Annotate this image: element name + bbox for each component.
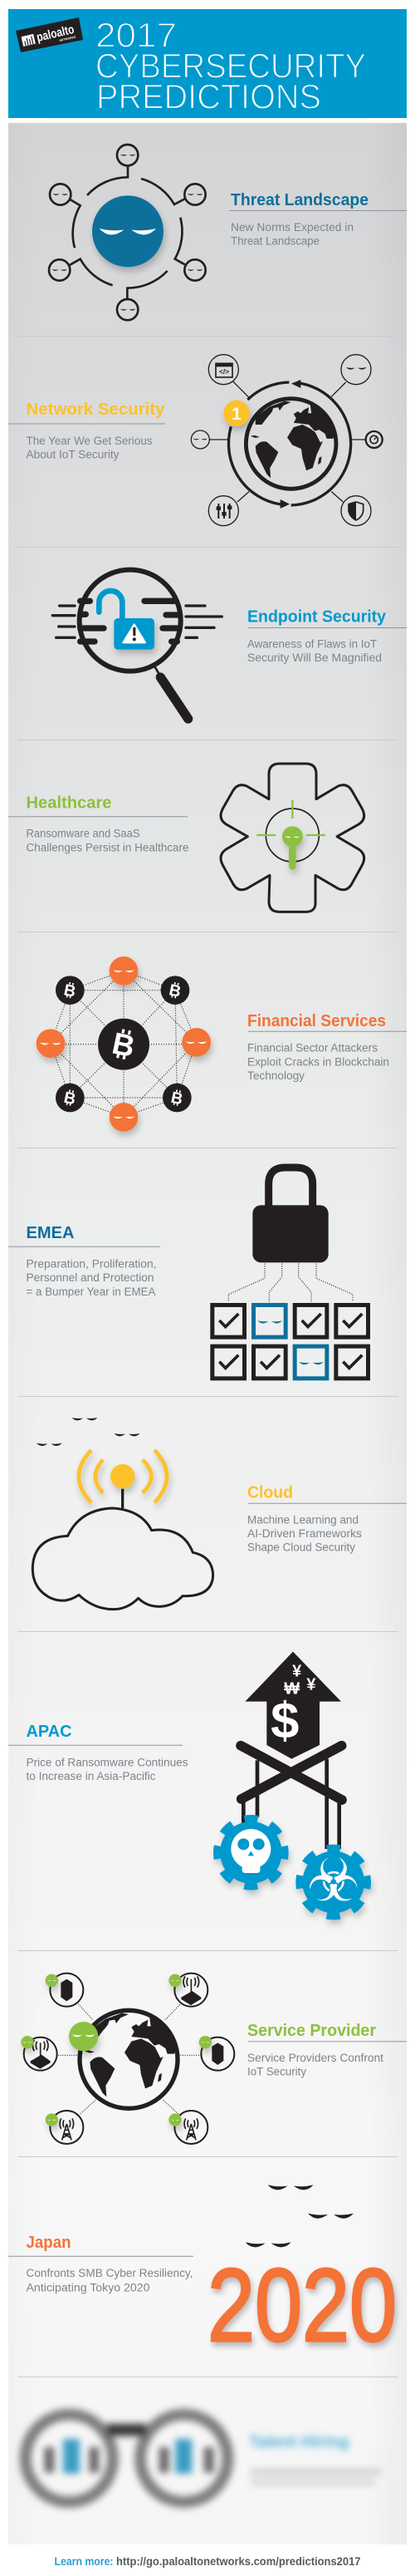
panel: cloud (32, 1418, 407, 1610)
currency symbols: $ (271, 1693, 299, 1750)
text: healthcare description: Challenges Persist in Healthcare (27, 841, 189, 853)
icon: skull gear (217, 1819, 285, 1886)
text: japan description (27, 2267, 193, 2293)
icon: star of life with target (221, 764, 364, 912)
badge: number 1 (223, 401, 250, 426)
icon: shield (349, 502, 364, 520)
icon: globe with orbit (191, 355, 383, 526)
panel: network security (8, 355, 383, 526)
heading: Threat Landscape: Threat Landscape (231, 191, 369, 209)
icon: green keyhole attacker (282, 826, 303, 870)
heading: Cloud: Cloud (247, 1484, 293, 1502)
heading: Network Security: Network Security (27, 401, 165, 419)
currency symbols (271, 1663, 316, 1750)
heading: Japan: Japan (27, 2234, 71, 2252)
text: japan description: Confronts SMB Cyber Resiliency, (27, 2267, 193, 2279)
text: cloud description: AI-Driven Frameworks (247, 1527, 362, 1540)
icon: rising ransom arrow with crossbones and gears (217, 1652, 367, 1916)
text: threat landscape description: New Norms Expected in (231, 221, 354, 234)
heading: Endpoint Security: Endpoint Security (247, 608, 387, 627)
icon: threat network (49, 145, 206, 320)
currency symbols: ¥ (292, 1663, 302, 1681)
text: endpoint security description (247, 637, 382, 664)
text: cloud description: Shape Cloud Security (247, 1541, 355, 1554)
title (95, 15, 366, 116)
text: threat landscape description: Threat Landscape (231, 234, 320, 248)
icon: bitcoin mesh (37, 956, 211, 1132)
currency symbols: ¥ (306, 1675, 316, 1694)
text: service provider description: IoT Security (247, 2066, 306, 2078)
text: EMEA description: = a Bumper Year in EMEA (27, 1286, 156, 1298)
panel: EMEA (8, 1168, 368, 1379)
panel: blurred talent hiring (26, 2415, 382, 2502)
icon: bitcoin mesh: B (169, 1089, 184, 1109)
logo: Palo Alto Networks (16, 17, 83, 52)
heading: Service Provider: Service Provider (247, 2022, 376, 2040)
heading: Talent Hiring: Talent Hiring (249, 2433, 349, 2451)
header banner (8, 9, 407, 118)
badge: number 1: 1 (232, 404, 242, 424)
icon: globe with connected devices (21, 1974, 234, 2144)
footer: learn more link: Learn more: (55, 2554, 113, 2568)
text: network security description: The Year We Get Serious (27, 435, 153, 447)
panel: endpoint security (52, 570, 407, 719)
text: cloud description (247, 1513, 362, 1554)
icon: browser code (216, 363, 232, 377)
text: network security description (27, 435, 153, 461)
panel: APAC (8, 1652, 367, 1916)
panel: japan (8, 2185, 397, 2363)
panel: threat landscape (49, 145, 407, 320)
panel: financial services (37, 956, 407, 1132)
heading: Healthcare: Healthcare (27, 794, 111, 812)
icon: padlock and checkbox grid (212, 1168, 368, 1379)
icon: biohazard gear: ☣ (307, 1845, 360, 1915)
title: 2017 (95, 15, 177, 55)
text: EMEA description: Personnel and Protection (27, 1271, 154, 1284)
text: network security description: About IoT Security (27, 449, 120, 461)
footer: learn more link: http://go.paloaltonetworks.com/predictions2017 (116, 2554, 361, 2568)
text: service provider description (247, 2052, 383, 2078)
icon: bitcoin mesh: B (62, 981, 77, 1001)
logo: Palo Alto Networks: NETWORKS (59, 35, 76, 42)
text: financial services description (247, 1042, 389, 1082)
title: PREDICTIONS (96, 76, 321, 116)
text: healthcare description: Ransomware and SaaS (27, 828, 139, 840)
icon: watching eyes (246, 2185, 354, 2247)
icon: gauge (366, 431, 383, 448)
text: APAC description (27, 1756, 188, 1782)
heading: APAC: APAC (27, 1723, 71, 1741)
text: service provider description: Service Providers Confront (247, 2052, 383, 2064)
heading: EMEA: EMEA (27, 1224, 75, 1242)
panel: service provider (21, 1974, 407, 2144)
text: financial services description: Financial Sector Attackers (247, 1042, 378, 1054)
text: EMEA description: Preparation, Proliferation, (27, 1257, 156, 1270)
text: endpoint security description: Security Will Be Magnified (247, 651, 382, 664)
icon: magnifier over open lock (52, 570, 222, 719)
icon: sliders (217, 504, 232, 519)
icon: bitcoin mesh: B (110, 1026, 138, 1064)
text: cloud description: Machine Learning and (247, 1513, 359, 1526)
icon: open padlock (99, 591, 154, 650)
text: APAC description: Price of Ransomware Continues (27, 1756, 188, 1768)
text: EMEA description (27, 1257, 156, 1298)
title: CYBERSECURITY (95, 47, 366, 85)
panel: healthcare (8, 764, 364, 912)
text: endpoint security description: Awareness of Flaws in IoT (247, 637, 377, 650)
icon: cloud with antenna (32, 1418, 213, 1610)
icon: browser code: </> (219, 367, 229, 376)
icon: bitcoin mesh: B (168, 981, 183, 1001)
text: APAC description: to Increase in Asia-Pacific (27, 1770, 156, 1782)
text: financial services description: Technology (247, 1069, 305, 1082)
currency symbols: ₩ (284, 1680, 300, 1698)
text: healthcare description (27, 828, 189, 853)
icon: antenna signal (79, 1450, 167, 1502)
icon: binoculars with people (26, 2415, 227, 2502)
text: threat landscape description (231, 221, 354, 248)
logo: Palo Alto Networks: paloalto (35, 22, 76, 45)
heading: Financial Services: Financial Services (247, 1012, 386, 1030)
text: financial services description: Exploit Cracks in Blockchain (247, 1055, 389, 1068)
icon: bitcoin mesh: B (62, 1089, 77, 1109)
text: japan description: Anticipating Tokyo 2020 (27, 2281, 149, 2293)
